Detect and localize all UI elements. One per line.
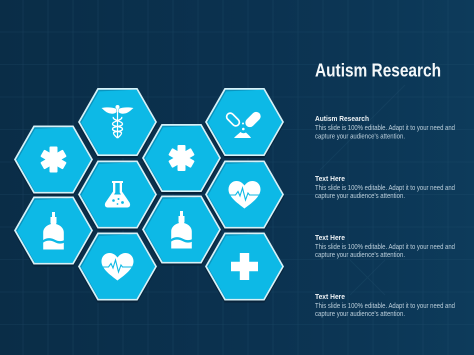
icon: flask — [105, 181, 130, 208]
hexagon: flask — [78, 160, 158, 230]
hexagon: bottle left — [14, 196, 94, 266]
icon: pills — [225, 110, 263, 138]
text block 2: Text Here — [315, 174, 345, 183]
icon: caduceus — [102, 105, 134, 138]
hexagon: heart right — [204, 160, 284, 230]
text block 3: capture your audience's attention. — [315, 250, 405, 259]
icon: asterisk — [168, 145, 195, 171]
icon: asterisk — [40, 146, 67, 172]
text block 3: Text Here — [315, 233, 345, 242]
text block 1: Autism Research — [315, 114, 369, 123]
icon: heartbeat — [102, 253, 134, 280]
text block 1: capture your audience's attention. — [315, 132, 405, 140]
hexagon: heart lower — [78, 232, 158, 302]
text block 4: capture your audience's attention. — [315, 309, 405, 318]
hexagon: bottle centre — [142, 196, 222, 266]
hexagon: caduceus — [78, 88, 158, 158]
icon: heartbeat — [228, 181, 260, 208]
text block 3 — [315, 233, 455, 259]
text block 4 — [315, 292, 455, 318]
hexagon: pills — [204, 88, 284, 158]
hexagon: plus — [204, 232, 284, 302]
hexagon: asterisk centre — [142, 124, 222, 194]
icon: bottle — [42, 212, 64, 250]
text block 2: capture your audience's attention. — [315, 191, 405, 200]
text block 1 — [315, 114, 455, 140]
title: Autism Research — [315, 60, 441, 80]
text block 4: Text Here — [315, 292, 345, 301]
text block 2 — [315, 174, 455, 200]
hexagon: asterisk left — [14, 126, 94, 196]
icon: plus — [231, 253, 258, 280]
icon: bottle — [170, 211, 192, 248]
